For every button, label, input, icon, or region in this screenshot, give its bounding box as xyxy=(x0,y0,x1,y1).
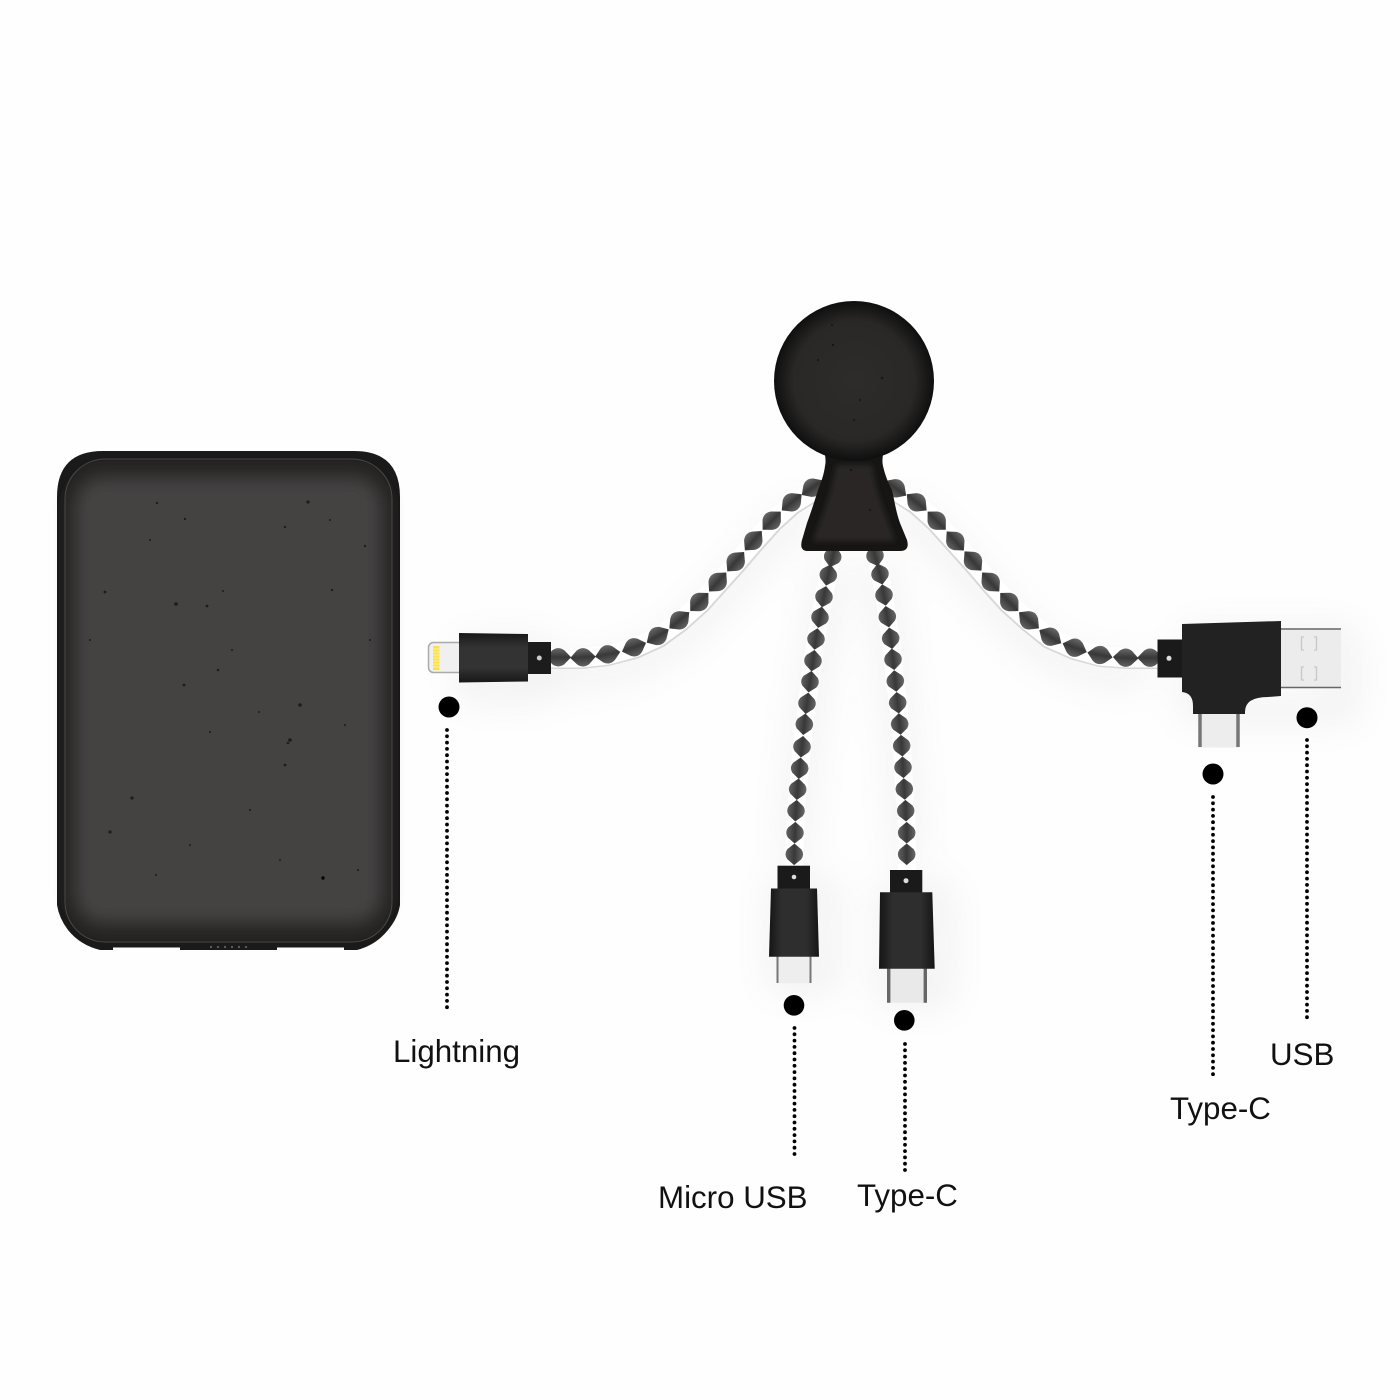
power bank face xyxy=(65,459,392,942)
centre-left cable xyxy=(785,544,844,870)
cable soft shadows xyxy=(470,505,1345,995)
centre-right cable xyxy=(864,543,916,875)
callout: Lightning: Lightning xyxy=(393,1034,520,1069)
callout: Type-C right xyxy=(1170,764,1271,1126)
callout: Micro USB xyxy=(658,995,808,1215)
callout: Micro USB: Micro USB xyxy=(658,1180,808,1215)
callout: Type-C centre xyxy=(857,1010,958,1213)
panel: multi-connector cable xyxy=(428,301,1341,1003)
callout: Type-C centre: Type-C xyxy=(857,1178,958,1213)
hub body xyxy=(774,301,934,551)
callout: USB xyxy=(1270,707,1334,1072)
Micro USB connector xyxy=(769,866,819,983)
power bank port xyxy=(210,946,248,948)
Type-C connector xyxy=(879,870,935,1003)
panel: power bank xyxy=(57,451,400,950)
left arm cable xyxy=(546,473,828,667)
right arm cable xyxy=(880,473,1163,668)
dual USB and Type-C connector xyxy=(1158,621,1341,748)
Lightning connector xyxy=(428,633,551,682)
callout: USB: USB xyxy=(1270,1037,1334,1072)
power bank speckles xyxy=(89,500,371,880)
callout: Type-C right: Type-C xyxy=(1170,1091,1271,1126)
callout: Lightning xyxy=(393,696,520,1069)
power bank shell xyxy=(57,451,400,950)
